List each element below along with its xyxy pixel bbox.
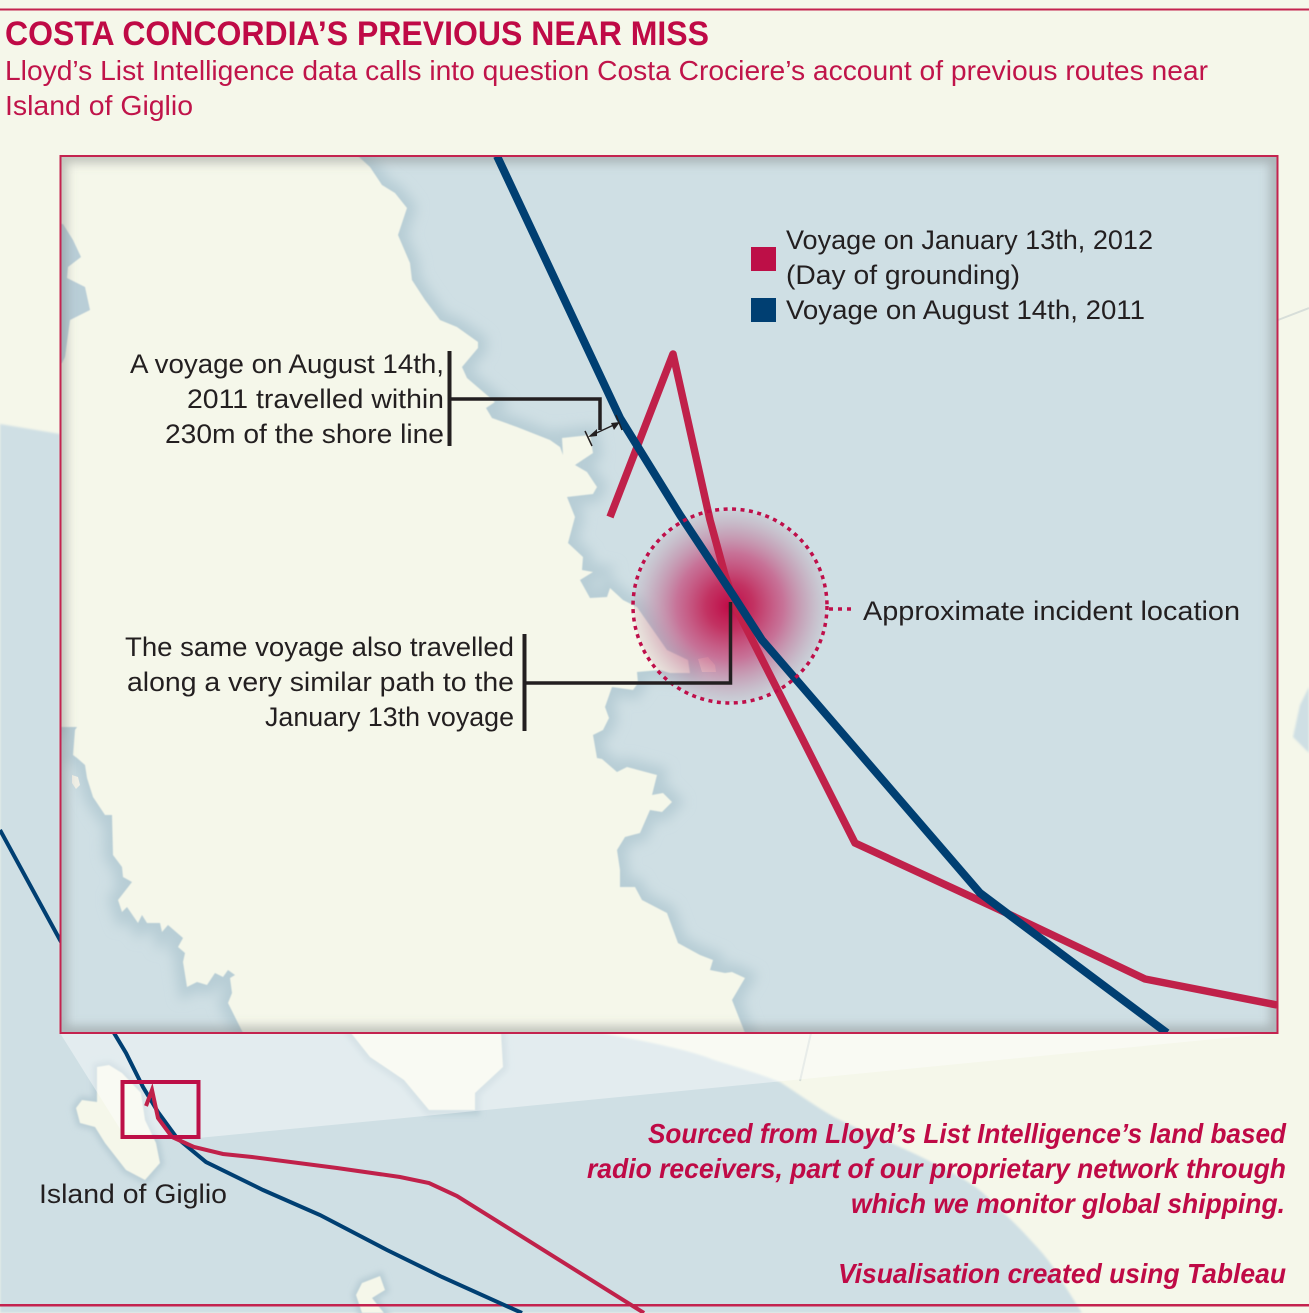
legend text: January voyage: (Day of grounding): [786, 260, 1020, 290]
legend text: August voyage: Voyage on August 14th, 2011: [786, 295, 1145, 325]
overview locator box: [122, 1082, 198, 1137]
incident glow: [634, 510, 826, 702]
legend swatch: August 14th 2011: [751, 298, 776, 322]
overview route: January 13th 2012: [146, 1090, 644, 1313]
source note: [587, 1118, 1287, 1289]
source note: radio receivers, part of our proprietary network through: [587, 1153, 1286, 1184]
legend text: January voyage: [786, 225, 1153, 290]
label: Island of Giglio: Island of Giglio: [39, 1179, 227, 1209]
subtitle: [5, 55, 1208, 121]
route: voyage on January 13th 2012: [610, 354, 1277, 1005]
legend: [751, 225, 1153, 325]
background map: overview: [0, 308, 1309, 1313]
callout text: The same voyage also travelled: [125, 632, 514, 662]
title: COSTA CONCORDIA’S PREVIOUS NEAR MISS: [5, 15, 709, 53]
callout text: 2011 travelled within: [187, 384, 444, 414]
rule: top: [0, 8, 1309, 10]
rule: bottom: [0, 1304, 1309, 1306]
zoom connector: [60, 1033, 1277, 1138]
subtitle: Lloyd’s List Intelligence data calls into question Costa Crociere’s account of previous routes near: [5, 55, 1208, 86]
callout: shore line distance: [130, 349, 622, 449]
inset land: [60, 156, 1277, 1033]
inset sea: [60, 156, 1277, 1033]
callout: similar path: [125, 602, 730, 732]
callout text: [130, 349, 444, 449]
overview sea: right margin: [1293, 687, 1309, 753]
route: voyage on August 14th 2011: [497, 156, 1167, 1033]
panel: inset map: [60, 156, 1278, 1033]
overview sea: [0, 424, 1082, 1313]
callout text: along a very similar path to the: [127, 667, 514, 697]
callout text: A voyage on August 14th,: [130, 349, 444, 379]
subtitle: Island of Giglio: [5, 90, 193, 121]
overview route: August 14th 2011: [0, 830, 522, 1313]
overview land: small island: [356, 1276, 385, 1313]
overview land: Island of Giglio: [76, 1065, 160, 1180]
source note: which we monitor global shipping.: [851, 1188, 1285, 1219]
legend swatch: January 13th 2012: [751, 247, 776, 271]
overview land: mainland peninsula: [351, 1033, 503, 1110]
callout text: January 13th voyage: [265, 702, 514, 732]
legend text: January voyage: Voyage on January 13th, 2012: [786, 225, 1153, 255]
inset frame: [60, 156, 1278, 1033]
callout text: 230m of the shore line: [165, 419, 444, 449]
callout text: [125, 632, 514, 732]
source note: Visualisation created using Tableau: [838, 1258, 1286, 1289]
incident circle: [633, 509, 827, 703]
callout: approximate incident location: Approximate incident location: [863, 596, 1240, 626]
